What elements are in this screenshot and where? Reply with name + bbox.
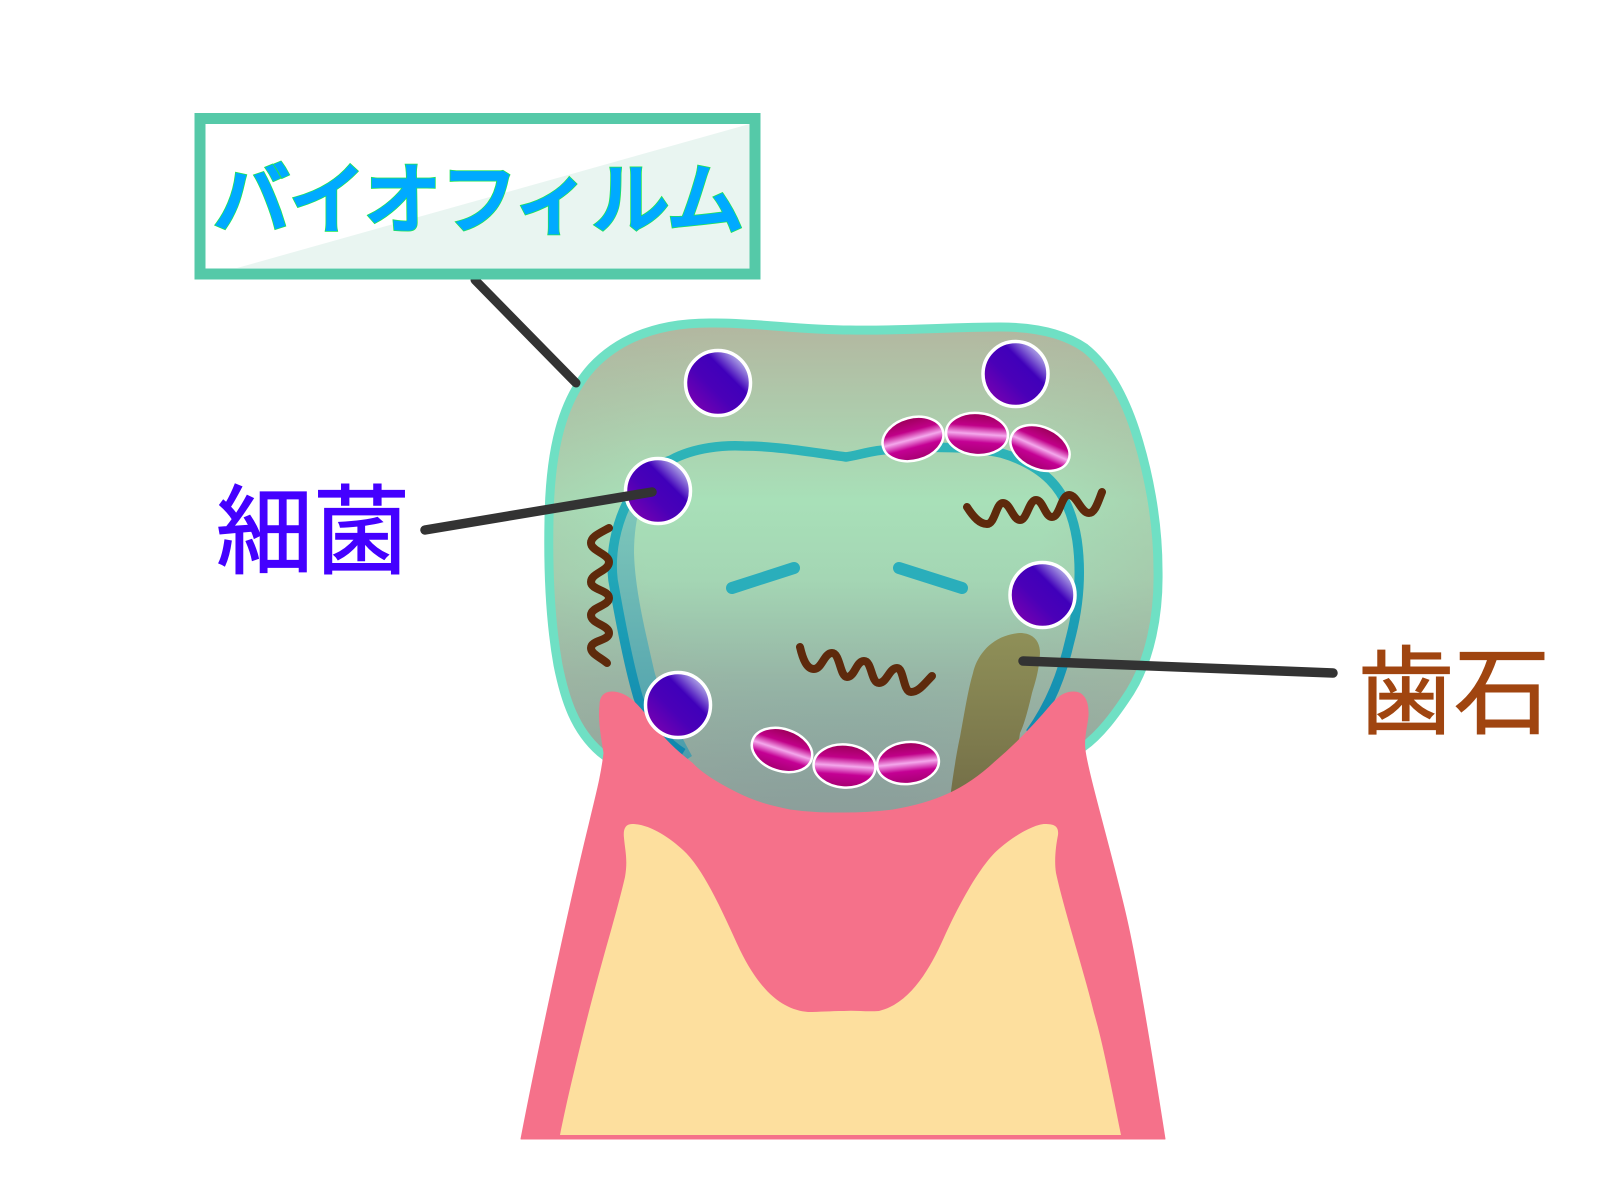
biofilm layer around tooth (549, 323, 1158, 830)
leader line: bacteria (425, 492, 652, 530)
alveolar bone (560, 824, 1121, 1135)
label text: biofilm: バイオフィルム (213, 158, 744, 244)
tooth outline (612, 446, 1079, 760)
round purple bacteria (626, 342, 1075, 738)
label text: biofilm: バイオフィルム (213, 158, 744, 244)
tooth groove marks (732, 568, 962, 588)
label: bacteria: 細菌 (216, 478, 410, 587)
label: calculus: 歯石 (1358, 640, 1550, 747)
spiral bacteria (591, 492, 1102, 692)
gum (521, 692, 1165, 1139)
leader line: calculus (1023, 661, 1333, 673)
leader line: biofilm (475, 280, 576, 383)
rod-shaped magenta bacteria (746, 410, 1077, 790)
calculus deposit (950, 633, 1040, 800)
label box: biofilm (200, 118, 755, 274)
